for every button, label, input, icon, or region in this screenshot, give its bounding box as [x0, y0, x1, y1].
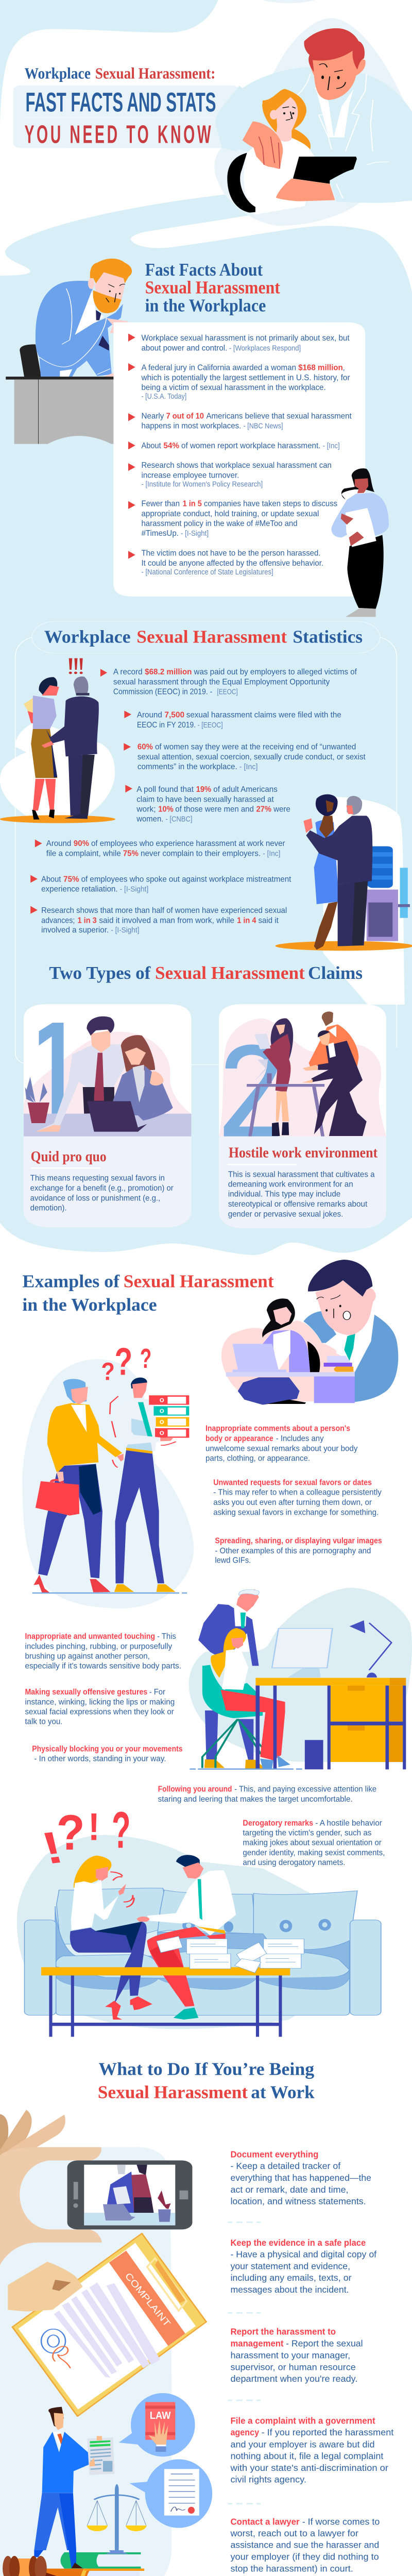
question and exclamation marks: ?	[57, 1805, 85, 1860]
fact 5: increase employee turnover.	[141, 470, 239, 480]
woman on sofa	[70, 1856, 152, 2020]
pale panel	[0, 2147, 171, 2576]
title	[13, 65, 263, 151]
panel: hostile work environment	[219, 1004, 386, 1228]
example: offensive gestures: instance, winking, licking the lips or making	[25, 1697, 175, 1706]
step: keep the evidence: your statement and evidence,	[230, 2261, 350, 2271]
stat bullets	[30, 669, 132, 914]
stat 4: of those were men and	[175, 804, 254, 814]
stat 3: 60%	[138, 742, 153, 752]
phone	[67, 2160, 192, 2229]
number 1	[39, 1023, 63, 1114]
speech bubbles	[119, 2393, 212, 2528]
text: hostile work environment	[228, 1170, 375, 1218]
text: quid pro quo: This means requesting sexual favors in	[30, 1174, 165, 1183]
stat 3: - [Inc]	[239, 762, 258, 771]
panel: fast facts card	[113, 323, 365, 597]
heading: two types: Sexual Harassment	[155, 962, 305, 983]
question and exclamation marks: !	[88, 1805, 100, 1849]
illustration: woman touching man with folders: ?	[140, 1343, 151, 1374]
desk	[255, 1678, 390, 1686]
section: examples	[22, 1260, 398, 1608]
title bar	[13, 86, 239, 148]
complaint label: COMPLAINT	[123, 2271, 173, 2329]
stat 4: A poll found that	[136, 785, 194, 794]
stat 6: 75%	[63, 874, 79, 884]
seated woman	[211, 1628, 246, 1678]
heading pill: statistics: Statistics	[293, 626, 363, 647]
example: unwanted touching: Inappropriate and unwanted touching	[25, 1632, 155, 1641]
fact 6: - [I-Sight]	[181, 529, 209, 537]
fact 3: 7 out of 10	[166, 411, 204, 420]
hero illustration	[214, 0, 412, 226]
illustration: man touching woman from behind	[0, 696, 115, 823]
example: vulgar images: lewd GIFs.	[215, 1556, 251, 1565]
illustration: leering man and woman at laptop	[221, 1260, 398, 1405]
heading pill: statistics: Workplace	[44, 626, 131, 647]
title line one	[24, 65, 215, 82]
sofa	[24, 1888, 381, 2015]
folders	[149, 1395, 189, 1438]
heading: two types: Two Types of	[49, 962, 151, 983]
fact 4: About	[141, 441, 161, 450]
stat 4: were	[273, 804, 290, 814]
stat 1: $68.2 million	[145, 667, 192, 676]
fact 4: 54%	[163, 441, 179, 450]
fact 1	[141, 333, 350, 353]
illustration: woman touching man with folders	[22, 1340, 194, 1608]
stat 2: - [EEOC]	[198, 721, 223, 729]
heading pill: statistics	[32, 621, 380, 653]
example: unwanted touching	[25, 1632, 181, 1671]
papers	[157, 1936, 304, 1973]
fact 3	[141, 411, 352, 431]
fact 6: #TimesUp.	[141, 529, 179, 538]
stat 5: 75%	[123, 849, 139, 858]
stat 1: A record	[113, 667, 143, 676]
table legs	[49, 1975, 282, 2037]
law book: LAW	[150, 2409, 171, 2421]
step: report to management	[230, 2326, 363, 2384]
example: offensive gestures: sexual facial expressions when they look or	[25, 1707, 174, 1717]
step: file a complaint: civil rights agency.	[230, 2474, 306, 2485]
step: report to management: management	[230, 2338, 284, 2349]
fact 6: 1 in 5	[183, 499, 202, 509]
stat 6	[41, 874, 291, 894]
illustrations: what to do	[0, 2110, 212, 2576]
stat 6: experience retaliation.	[41, 885, 118, 894]
fact 2: - [U.S.A. Today]	[141, 392, 186, 400]
stat 4: of adult Americans	[213, 785, 278, 794]
stat 2: EEOC in FY 2019.	[137, 720, 196, 730]
heading: examples: in the Workplace	[22, 1294, 157, 1315]
heading: what to do: Sexual Harassment	[98, 2082, 248, 2102]
step: file a complaint	[230, 2415, 394, 2485]
fact 2: A federal jury in California awarded a woman	[141, 363, 296, 372]
plant	[25, 1077, 49, 1123]
example: derogatory remarks	[243, 1818, 385, 1867]
heading: two types	[49, 962, 363, 983]
title line one: Workplace	[24, 65, 91, 82]
man's head	[304, 28, 366, 100]
example: derogatory remarks: and using derogatory namets.	[243, 1858, 345, 1867]
example: following you around: Following you around	[158, 1785, 232, 1794]
two men at desk	[302, 1011, 367, 1136]
question and exclamation marks: !	[37, 1822, 68, 1873]
stat 7: said it	[259, 916, 279, 925]
stat 5: Around	[46, 839, 71, 848]
fact 6: harassment policy in the wake of #MeToo and	[141, 519, 298, 528]
stat 4: claim to have been sexually harassed at	[136, 794, 274, 804]
stat 3	[138, 742, 366, 771]
example: offensive gestures: talk to you.	[25, 1717, 62, 1726]
stat 1: [EEOC]	[217, 688, 238, 696]
example: unwanted touching: especially if it's towards sensitive body parts.	[25, 1662, 181, 1671]
illustration: couch scene	[17, 1802, 381, 2037]
heading: examples	[22, 1271, 274, 1315]
title: quid pro quo: Quid pro quo	[31, 1148, 107, 1165]
example texts: first group	[205, 1424, 382, 1565]
fact 6	[141, 499, 337, 538]
stat 6: - [I-Sight]	[120, 885, 148, 893]
stat 5: of employees who experience harassment at work never	[91, 839, 285, 848]
chair	[202, 1665, 263, 1718]
step: contact a lawyer	[230, 2516, 380, 2573]
fact 3: - [NBC News]	[243, 422, 283, 430]
scales of justice	[87, 2484, 147, 2550]
step: keep the evidence: including any emails, texts, or	[230, 2273, 352, 2283]
step: document everything	[230, 2149, 371, 2207]
fact 4: - [Inc]	[323, 442, 340, 450]
step: document everything: act or remark, date and time,	[230, 2184, 349, 2195]
fact 1: - [Workplaces Respond]	[229, 344, 301, 352]
man at laptop	[36, 1016, 126, 1132]
stat 7: involved a superior.	[41, 925, 109, 935]
step: report to management: - Report the sexual	[286, 2338, 363, 2349]
question marks	[101, 1340, 151, 1385]
exclamation marks and heads	[39, 658, 89, 696]
step: document everything: Document everything	[230, 2149, 318, 2159]
stat 2: 7,500	[164, 710, 184, 720]
example: inappropriate comments	[205, 1424, 358, 1463]
stat 1	[113, 667, 357, 697]
text: hostile work environment: individual. This type may include	[228, 1190, 340, 1199]
example: unwanted touching: includes pinching, rubbing, or purposefully	[25, 1641, 173, 1651]
fact 4: of women report workplace harassment.	[181, 441, 320, 450]
tufts	[182, 1919, 331, 1933]
heading: examples: Sexual Harassment	[124, 1271, 274, 1291]
example: physically blocking: - In other words, standing in your way.	[34, 1754, 166, 1764]
heading: what to do: at Work	[251, 2082, 315, 2102]
example: inappropriate comments: body or appearance	[205, 1434, 273, 1443]
table top	[41, 1967, 290, 1975]
fact 5	[141, 461, 332, 488]
signed document	[164, 2469, 199, 2516]
woman at laptop	[113, 1035, 173, 1121]
fact 5: - [Institute for Women's Policy Research]	[141, 480, 263, 488]
stat 7: 1 in 4	[237, 916, 256, 925]
fact bullets	[128, 333, 135, 559]
stat 2	[137, 710, 341, 730]
statistics outer outline	[15, 637, 397, 1065]
example: offensive gestures	[25, 1687, 175, 1726]
stat 5	[46, 839, 285, 858]
stat 5: never complain to their employers.	[141, 849, 261, 858]
stat 7: 1 in 3	[78, 916, 97, 925]
illustration: woman holding papers	[331, 468, 389, 617]
stat 4: women.	[136, 814, 163, 823]
fact 6: Fewer than	[141, 499, 180, 509]
background blob: main blue section	[0, 194, 412, 1255]
steps text	[228, 2149, 394, 2573]
seated woman	[227, 89, 357, 215]
example: derogatory remarks: Derogatory remarks	[243, 1818, 313, 1827]
step: contact a lawyer: Contact a lawyer	[230, 2516, 300, 2527]
example: offensive gestures: Making sexually offensive gestures	[25, 1687, 147, 1697]
fact 2: $168 million	[298, 363, 343, 372]
hand holding phone	[0, 2110, 102, 2265]
step: file a complaint: agency	[230, 2427, 259, 2437]
stat 6: About	[41, 874, 61, 884]
title line one: Sexual Harassment:	[95, 65, 215, 82]
section: fast facts	[6, 259, 365, 597]
heading: fast facts	[145, 259, 280, 315]
fact 3: happens in most workplaces.	[141, 421, 241, 431]
stat 7: said it involved a man from work, while	[99, 916, 234, 925]
stat 4: 10%	[158, 804, 174, 814]
stat 7: advances;	[41, 916, 75, 925]
step: document everything: - Keep a detailed tracker of	[230, 2161, 341, 2171]
text: hostile work environment: gender or pervasive sexual jokes.	[228, 1209, 343, 1218]
heading pill: statistics: Sexual Harassment	[136, 626, 287, 647]
heading: two types: Claims	[308, 962, 363, 983]
laptop	[87, 1101, 147, 1132]
example: offensive gestures: - For	[149, 1687, 165, 1697]
fact 2	[141, 363, 350, 400]
complaint clipboard	[12, 2233, 207, 2416]
step: keep the evidence: messages about the incident.	[230, 2284, 349, 2295]
stat 5: file a complaint, while	[46, 849, 121, 858]
panel: quid pro quo	[23, 1004, 191, 1227]
example: following you around	[158, 1785, 376, 1804]
text: quid pro quo	[30, 1174, 174, 1212]
fact 7: - [National Conference of State Legislatures]	[141, 568, 273, 576]
example: physically blocking: Physically blocking you or your movements	[32, 1744, 183, 1754]
question marks: ?	[114, 1340, 132, 1383]
step: report to management: harassment to your manager,	[230, 2350, 350, 2360]
heading: fast facts: Fast Facts About	[145, 259, 263, 280]
law book	[145, 2402, 175, 2452]
example: unwanted touching: brushing up against another person,	[25, 1652, 150, 1661]
illustration: books and gavel	[2, 2550, 144, 2576]
illustration: couch scene: ?	[112, 1802, 131, 1859]
stat 1: Commission (EEOC) in 2019. -	[113, 687, 212, 697]
illustration: man looming over seated woman at desk	[189, 1588, 412, 1769]
stat 4	[136, 785, 290, 823]
stat 2: Around	[137, 710, 162, 720]
monitor	[288, 1668, 320, 1677]
fact 3: Nearly	[141, 411, 164, 420]
step: keep the evidence	[230, 2238, 377, 2295]
background blob: top left	[0, 0, 218, 132]
question and exclamation marks	[37, 1802, 131, 1873]
fact 1: about power and control.	[141, 344, 227, 353]
heading: fast facts: in the Workplace	[145, 295, 266, 315]
text: quid pro quo: exchange for a benefit (e.g., promotion) or	[30, 1183, 174, 1193]
fact 4	[141, 441, 340, 450]
stat 4: - [CNBC]	[165, 815, 192, 823]
example: unwanted requests	[213, 1478, 382, 1517]
illustration: man and woman at water cooler	[276, 794, 412, 1005]
fact 2: ,	[343, 363, 345, 372]
example: inappropriate comments: - Includes any	[276, 1434, 324, 1443]
stat 5: 90%	[74, 839, 89, 848]
text: quid pro quo: demotion).	[30, 1203, 67, 1212]
pale blob behind figures	[214, 0, 412, 226]
man's coat	[217, 67, 412, 203]
stat 4: 19%	[196, 785, 211, 794]
fact 7	[141, 549, 323, 576]
step: report to management: Report the harassment to	[230, 2326, 336, 2337]
man in blue suit	[34, 2407, 114, 2550]
stat 7: - [I-Sight]	[111, 926, 139, 934]
stat 5: - [Inc]	[263, 849, 280, 857]
lamp	[350, 1620, 377, 1677]
heading: fast facts: Sexual Harassment	[145, 277, 280, 297]
section: two types	[23, 962, 363, 1227]
desk and bearded man illustration	[6, 259, 132, 444]
question marks: ?	[101, 1358, 115, 1385]
number 2	[224, 1044, 279, 1137]
hand on clipboard	[8, 2262, 83, 2312]
stat 6: of employees who spoke out against workplace mistreatment	[81, 874, 291, 884]
stat 7	[41, 906, 287, 935]
heading: examples: Examples of	[22, 1271, 120, 1291]
example: vulgar images	[215, 1536, 382, 1565]
woman with tablet	[254, 1019, 293, 1136]
man on sofa	[136, 1855, 236, 2020]
heading: what to do	[98, 2059, 315, 2102]
section: statistics	[15, 621, 397, 1065]
stat 4: work;	[136, 804, 156, 814]
example: physically blocking	[32, 1744, 183, 1764]
desk and lamp	[247, 1059, 324, 1137]
text: quid pro quo: avoidance of loss or punishment (e.g.,	[30, 1193, 160, 1202]
example texts: second group	[25, 1632, 385, 1867]
stat 3: comments” in the workplace.	[138, 762, 237, 771]
example: inappropriate comments: parts, clothing, or appearance.	[205, 1454, 310, 1463]
stat 4: 27%	[256, 804, 271, 814]
example: unwanted touching: - This	[157, 1632, 176, 1641]
